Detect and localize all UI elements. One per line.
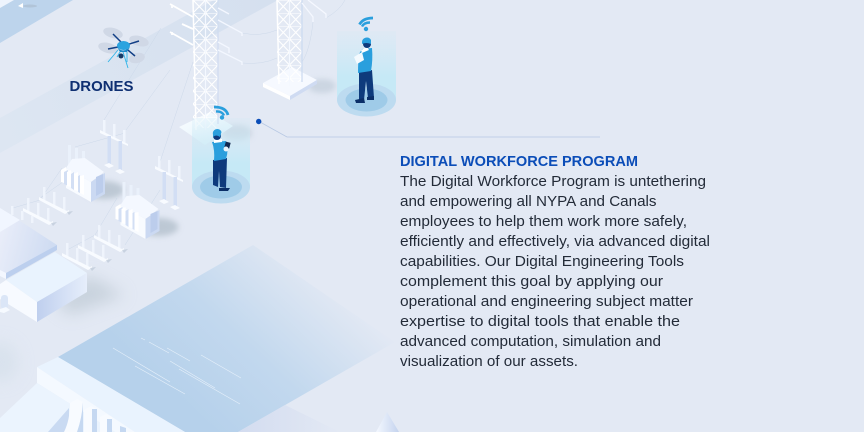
small tank (0, 295, 10, 313)
body text: expertise to digital tools that enable the (400, 313, 680, 330)
icon: wifi (360, 18, 373, 31)
gantry 1 (100, 120, 128, 174)
gantry 2 (155, 156, 183, 210)
label: drones: DRONES (70, 78, 134, 95)
figure (212, 129, 231, 191)
glow column (337, 31, 396, 101)
worker 1 with wifi (192, 107, 250, 204)
top-left water (0, 0, 73, 43)
transformer 2 (116, 182, 178, 239)
dam (0, 357, 185, 432)
bottom cone (376, 412, 399, 432)
lower water shade (238, 405, 340, 432)
top-left small structure (0, 0, 37, 8)
body text: advanced computation, simulation and (400, 333, 661, 350)
power lines (13, 0, 345, 250)
building: gabled roof (0, 208, 57, 279)
soft ground shadow (0, 342, 18, 382)
building shadow (55, 275, 125, 315)
body text: visualization of our assets. (400, 353, 578, 370)
body text: efficiently and effectively, via advanced digital (400, 233, 710, 250)
tower 1 (170, 0, 252, 145)
insulator rows (11, 187, 128, 271)
body text: and empowering all NYPA and Canals (400, 193, 656, 210)
figure (354, 38, 374, 103)
body text (400, 173, 710, 370)
body text: employees to help them work more safely, (400, 213, 687, 230)
body text: The Digital Workforce Program is untethering (400, 173, 706, 190)
body text: operational and engineering subject matter (400, 293, 693, 310)
ground rings (337, 84, 396, 116)
icon: drone (97, 26, 150, 68)
tower 2 (263, 0, 336, 100)
diagonal ground band (0, 0, 278, 153)
glow column (192, 118, 250, 188)
ground rings (192, 170, 250, 204)
icon: wifi (214, 107, 228, 120)
main reservoir water (58, 245, 395, 432)
body text: capabilities. Our Digital Engineering Tools (400, 253, 684, 270)
worker 2 with wifi (337, 18, 396, 116)
heading: DIGITAL WORKFORCE PROGRAM (400, 153, 638, 170)
building: flat block (0, 252, 87, 322)
body text: complement this goal by applying our (400, 273, 663, 290)
transformer 1 (61, 145, 124, 202)
connector line (256, 119, 600, 137)
